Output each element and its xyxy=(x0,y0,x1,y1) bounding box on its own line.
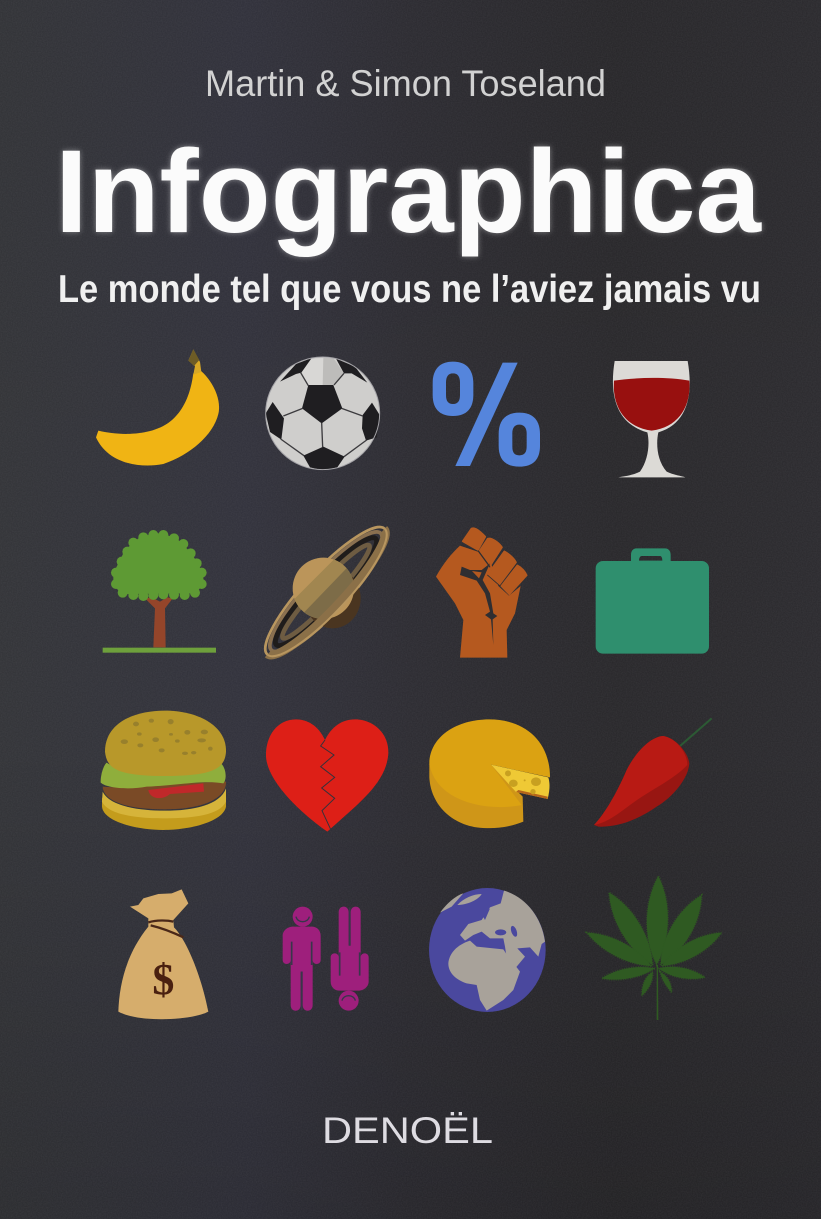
icon: burger xyxy=(101,711,226,830)
icon: cheese xyxy=(429,719,550,828)
title: Infographica xyxy=(55,126,762,258)
icon: cannabis leaf xyxy=(587,876,722,1020)
icon: broken heart xyxy=(266,719,388,832)
figure: upright xyxy=(283,907,321,1011)
title: Infographica xyxy=(55,126,762,258)
icon: percent sign xyxy=(433,362,540,467)
icon: chilli pepper xyxy=(594,718,712,827)
icon: banana xyxy=(96,349,219,465)
figure: upside-down xyxy=(331,907,369,1011)
icon: Saturn xyxy=(264,526,390,660)
publisher logo: DENOËL xyxy=(322,1110,493,1151)
icon: briefcase xyxy=(596,548,709,654)
icon: tree xyxy=(103,530,216,653)
icon: raised fist xyxy=(436,528,527,658)
icon: money bag: $ xyxy=(152,955,174,1004)
icon: globe xyxy=(429,888,546,1012)
authors: Martin & Simon Toseland xyxy=(205,63,606,104)
icon: upright and upside-down figures xyxy=(283,907,369,1011)
icon: football xyxy=(266,357,380,470)
icon: wine glass xyxy=(613,361,690,477)
icon: money bag xyxy=(118,889,208,1019)
